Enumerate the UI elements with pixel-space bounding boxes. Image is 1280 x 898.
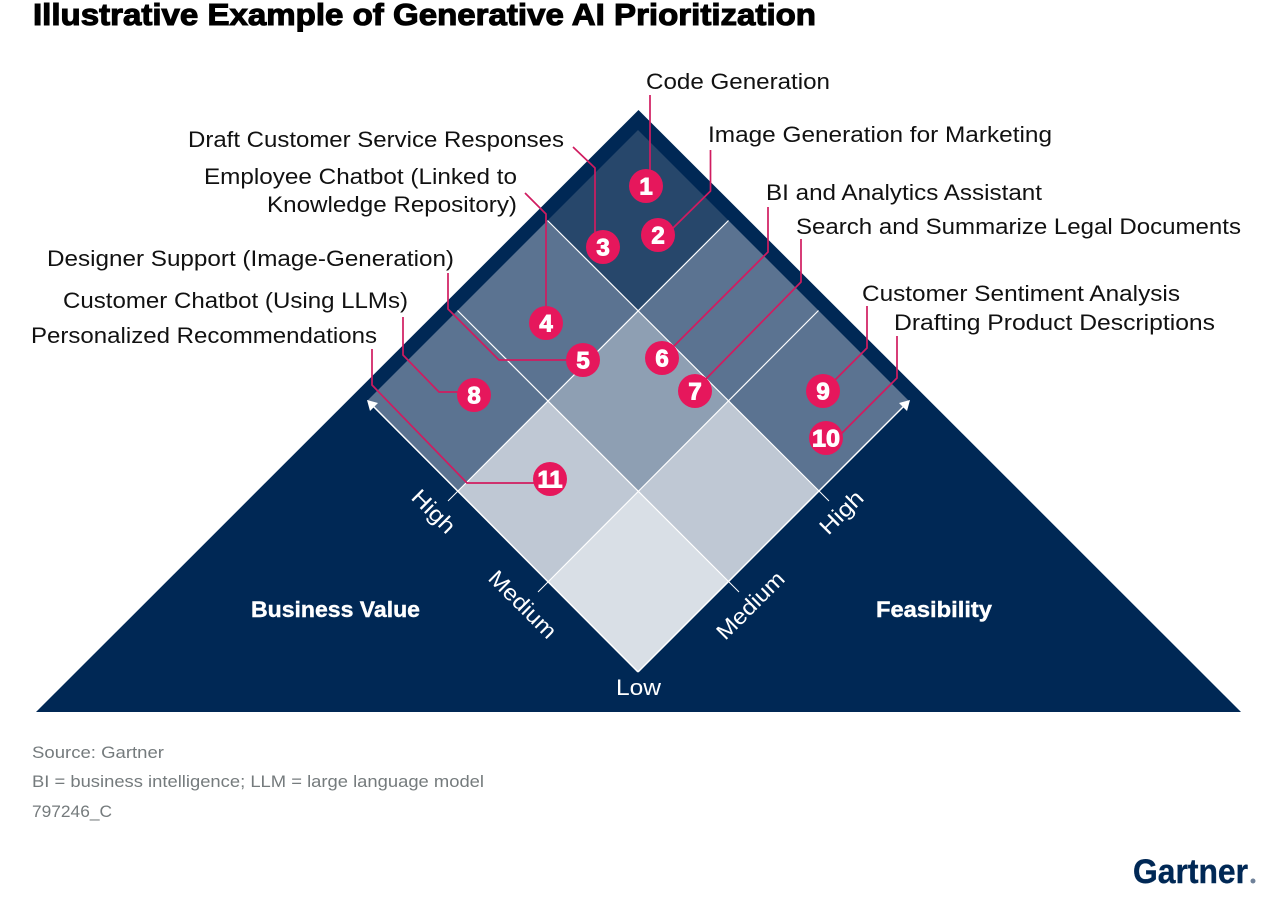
logo: Gartner: Gartner: [1133, 853, 1248, 891]
marker 10: [809, 421, 843, 455]
prioritization matrix: [368, 130, 908, 672]
axis label: low: Low: [616, 675, 661, 700]
label: Employee Chatbot: Employee Chatbot (Linked to: [204, 164, 517, 189]
footnotes: Source: Gartner: [32, 743, 164, 762]
label: Designer Support: Designer Support (Image-Generation): [47, 246, 454, 271]
footnotes: [32, 743, 484, 821]
arrow: business value axis: [367, 400, 638, 672]
marker 8: [457, 378, 491, 412]
marker 7: 7: [688, 378, 702, 406]
label: Image Generation for Marketing: Image Generation for Marketing: [708, 122, 1052, 147]
marker 8: 8: [467, 382, 481, 410]
marker 1: [629, 169, 663, 203]
cell: low value, medium feasibility: [638, 401, 819, 582]
marker 5: 5: [576, 348, 590, 374]
footnotes: 797246_C: [32, 802, 112, 821]
cell: medium value, low feasibility: [458, 401, 638, 582]
marker 5: [566, 343, 600, 377]
marker 11: [533, 462, 567, 496]
label: Customer Sentiment Analysis: Customer Sentiment Analysis: [862, 281, 1180, 306]
axis label: high feasibility: High: [814, 485, 869, 540]
cell: low value, high feasibility: [729, 310, 908, 491]
label: BI and Analytics Assistant: BI and Analytics Assistant: [766, 180, 1042, 205]
prioritization triangle background: [36, 110, 1241, 712]
marker 4: 4: [539, 310, 553, 338]
cell: low value, low feasibility: [548, 491, 729, 672]
label: Personalized Recommendations: Personalized Recommendations: [31, 323, 377, 348]
axis tick marks: [448, 491, 829, 592]
marker 4: [529, 306, 563, 340]
marker 10: 10: [812, 426, 840, 452]
internal grid lines: [458, 220, 819, 582]
marker 7: [678, 374, 712, 408]
marker 2: 2: [651, 222, 665, 250]
cell: high value, medium feasibility: [458, 220, 638, 401]
axis label: high value: High: [406, 484, 461, 539]
marker 3: 3: [596, 234, 610, 262]
axis label: medium feasibility: Medium: [711, 566, 790, 645]
marker 6: [645, 341, 679, 375]
cell: medium value, medium feasibility: [548, 310, 729, 491]
label: Drafting Product Descriptions: Drafting Product Descriptions: [894, 310, 1215, 335]
cell: medium value, high feasibility: [638, 220, 818, 401]
marker 3: [586, 230, 620, 264]
arrow: feasibility axis: [638, 400, 910, 672]
marker 1: 1: [639, 174, 653, 200]
label: Search and Summarize Legal Documents: Search and Summarize Legal Documents: [796, 214, 1241, 239]
label: Code Generation: Code Generation: [646, 69, 830, 94]
label: Customer Chatbot: Customer Chatbot (Using LLMs): [63, 288, 408, 313]
marker 2: [641, 218, 675, 252]
label: Employee Chatbot: [204, 164, 517, 217]
leader lines: [372, 95, 897, 483]
marker 11: 11: [538, 466, 562, 494]
axis title: business value: Business Value: [251, 597, 420, 622]
cell: high value, low feasibility: [368, 310, 548, 491]
cell: high value, high feasibility: [548, 130, 728, 310]
marker 6: 6: [655, 346, 669, 372]
axis label: medium value: Medium: [483, 565, 562, 644]
marker 9: 9: [816, 378, 830, 406]
footnotes: BI = business intelligence; LLM = large language model: [32, 772, 484, 791]
marker 9: [806, 374, 840, 408]
label: Draft Customer Service Responses: Draft Customer Service Responses: [188, 127, 564, 152]
axis title: feasibility: Feasibility: [876, 597, 993, 622]
label: Employee Chatbot: Knowledge Repository): [267, 192, 517, 217]
